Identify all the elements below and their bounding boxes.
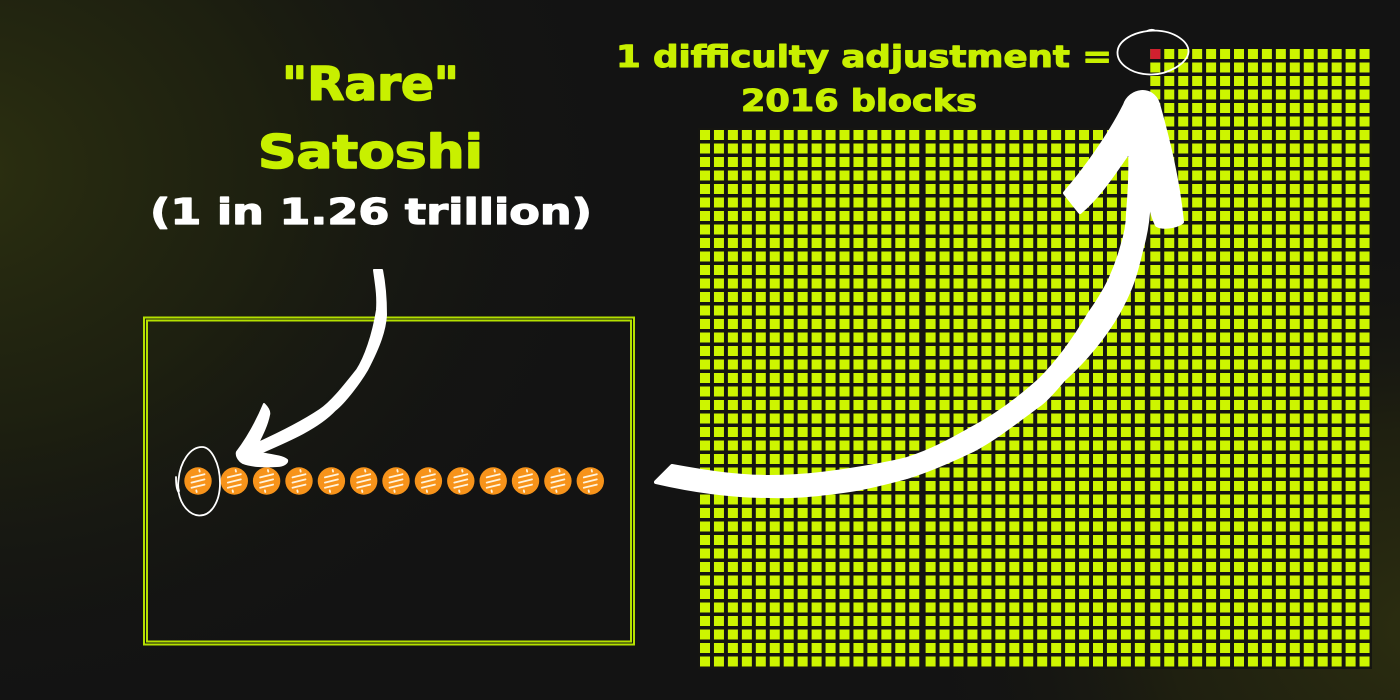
arrow: rare label to first coin (237, 270, 386, 466)
subtitle: odds: (1 in 1.26 trillion) (150, 192, 592, 233)
block grid: 2016 blocks (698, 54, 1372, 669)
heading: difficulty adjustment: 2016 blocks (741, 84, 977, 119)
heading: difficulty adjustment (616, 40, 1112, 119)
panel: satoshi box (144, 318, 634, 644)
circled red block (1117, 30, 1189, 75)
coin row (184, 467, 604, 495)
circled rare satoshi (176, 447, 220, 516)
title: Rare Satoshi: Satoshi (258, 125, 483, 179)
title: Rare Satoshi (258, 57, 483, 179)
red block: one block found (1150, 49, 1160, 59)
arrow: satoshi box to block grid (656, 92, 1182, 496)
heading: difficulty adjustment: 1 difficulty adjustment = (616, 40, 1112, 75)
title: Rare Satoshi: "Rare" (282, 57, 459, 111)
